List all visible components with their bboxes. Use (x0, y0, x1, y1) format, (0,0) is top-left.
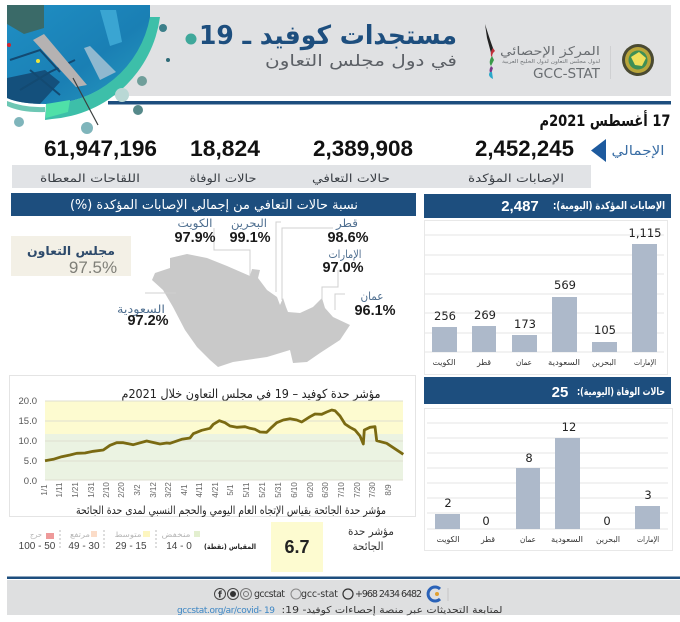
bar: Bahrain: 0 (603, 514, 611, 528)
bar: Bahrain (592, 323, 617, 367)
panel heading: نسبة حالات التعافي من إجمالي الإصابات المؤكدة (%) (70, 198, 358, 213)
heading: 2,487 (501, 198, 539, 215)
header image: vaccine circle (7, 5, 196, 134)
header band (100, 5, 671, 104)
x axis dates: 7/30 (368, 482, 377, 498)
heading (424, 377, 671, 404)
label: Qatar: قطر (335, 216, 358, 231)
total label with arrow (591, 139, 664, 162)
heading (424, 194, 671, 218)
label: Kuwait: 97.9% (174, 230, 216, 246)
panel: recovery rate map (11, 193, 416, 367)
bar: Qatar: قطر (476, 358, 491, 367)
callout: GCC average: مجلس التعاون (27, 244, 115, 259)
label: Saudi Arabia: السعودية (117, 302, 165, 317)
stat: recovered (312, 136, 413, 185)
updates row (177, 605, 502, 616)
x axis dates: 4/1 (180, 484, 189, 496)
label: UAE: 97.0% (322, 260, 364, 276)
y axis: 15.0 (18, 416, 37, 427)
label: Qatar (327, 216, 369, 246)
contact row: gccstat (254, 589, 285, 600)
x axis dates: 5/1 (226, 484, 235, 496)
scale: severe: حرج (30, 530, 42, 539)
panel: daily confirmed cases (424, 194, 671, 374)
y axis: 10.0 (18, 436, 37, 447)
x axis dates: 5/21 (258, 482, 267, 498)
contact row: gcc-stat (301, 589, 338, 600)
contact row: f (218, 590, 222, 600)
bar: Oman (512, 317, 537, 367)
totals labels band (12, 165, 591, 188)
x axis dates (40, 482, 393, 498)
label: Bahrain (229, 216, 271, 246)
callout: GCC average: 97.5% (69, 258, 117, 277)
logo: GCC emblem (622, 44, 654, 76)
y axis (18, 396, 37, 487)
leader lines (145, 222, 345, 310)
bar: Qatar: 0 (482, 514, 490, 528)
stat: recovered: حالات التعافي (312, 171, 390, 185)
bar: UAE (629, 226, 661, 368)
label: Oman: عمان (360, 289, 384, 303)
chart caption: مؤشر حدة الجائحة بقياس الإتجاه العام اليومي والحجم النسبي لمدى حدة الجائحة (76, 503, 386, 518)
bar: Oman: عمان (520, 535, 536, 544)
main heading: مستجدات كوفيد ـ 19 (199, 21, 457, 51)
bar: Qatar (472, 308, 496, 367)
bar: Kuwait: الكويت (432, 358, 456, 367)
scale: medium (114, 530, 150, 552)
bar: UAE: الإمارات (637, 535, 659, 545)
x axis dates: 7/10 (337, 482, 346, 498)
heading: 25 (552, 384, 568, 401)
scale: medium: 29 - 15 (115, 541, 147, 552)
bar: Kuwait: 2 (444, 496, 452, 510)
bar: UAE: الإمارات (634, 358, 656, 368)
stat: confirmed (468, 136, 574, 186)
subheading: في دول مجلس التعاون (265, 51, 457, 71)
bar: Saudi Arabia: السعودية (548, 358, 580, 367)
stat: recovered: 2,389,908 (313, 136, 413, 161)
severity index label (348, 525, 394, 553)
x axis dates: 1/11 (55, 482, 64, 497)
bar: Saudi Arabia: 569 (554, 278, 576, 292)
label: UAE: الإمارات (328, 247, 362, 262)
date: 17 أغسطس 2021م (540, 110, 670, 130)
updates row: gccstat.org/ar/covid- 19 (177, 606, 275, 616)
stat: vaccines: 61,947,196 (44, 136, 157, 161)
severity index label: مؤشر حدة (348, 525, 394, 538)
label: Kuwait: الكويت (178, 216, 212, 231)
scale: low (162, 530, 200, 552)
label: Bahrain: 99.1% (229, 230, 271, 246)
x axis dates: 1/31 (87, 482, 96, 498)
bar: Saudi Arabia (548, 278, 580, 367)
map of GCC (152, 254, 350, 367)
x axis dates: 1/21 (71, 482, 80, 498)
bar: Saudi Arabia (551, 420, 583, 544)
x axis dates: 3/12 (149, 482, 158, 498)
bar: Kuwait (435, 496, 460, 544)
bar: Qatar: 269 (474, 308, 496, 322)
x axis dates: 2/10 (102, 482, 111, 498)
panel heading (11, 193, 416, 216)
severity scale legend: المقياس (نقطة) (204, 543, 256, 551)
panel: daily deaths (424, 377, 672, 550)
contact row: +968 2434 6482 (355, 589, 422, 600)
x axis dates: 8/9 (384, 484, 393, 496)
severity index value (271, 522, 323, 572)
bar: Kuwait (432, 309, 457, 367)
bar: Saudi Arabia: السعودية (551, 535, 583, 544)
x axis dates: 5/31 (274, 482, 283, 498)
x axis dates: 3/22 (164, 482, 173, 498)
line chart: pandemic severity index (10, 376, 416, 518)
stat: deaths (190, 136, 260, 186)
logo: GCC-STAT (485, 24, 611, 82)
label: Qatar: 98.6% (327, 230, 369, 246)
stat: deaths: حالات الوفاة (190, 171, 256, 186)
stat: vaccines: اللقاحات المعطاة (40, 171, 140, 185)
x axis dates: 1/1 (40, 484, 49, 496)
y axis: 20.0 (18, 396, 37, 407)
bar: Oman: عمان (516, 358, 532, 367)
updates row: لمتابعة التحديثات عبر منصة إحصاءات كوفيد- 19: (282, 605, 502, 616)
bar: Qatar: قطر (480, 535, 495, 544)
severity index label: الجائحة (352, 540, 384, 553)
bar: Bahrain: 105 (594, 323, 616, 337)
label: Kuwait (174, 216, 216, 246)
title (199, 21, 457, 71)
scale: high: مرتفع (70, 530, 90, 539)
label: Bahrain: البحرين (231, 216, 267, 231)
bar: Bahrain (596, 514, 620, 544)
scale: high: 49 - 30 (68, 541, 100, 552)
severity bands (45, 401, 403, 480)
bar: UAE: 1,115 (629, 226, 661, 240)
label: Oman (354, 289, 396, 319)
severity index value: 6.7 (284, 537, 310, 557)
bar: Oman (516, 451, 540, 544)
bar: Oman: 8 (525, 451, 533, 465)
bar: Qatar (480, 514, 495, 544)
bar: Kuwait: الكويت (436, 535, 460, 544)
footer (7, 576, 680, 616)
scale: low: 14 - 0 (166, 541, 192, 552)
x axis dates: 6/20 (306, 482, 315, 498)
y axis: 5.0 (24, 456, 37, 467)
logo: GCC-STAT: GCC-STAT (533, 67, 600, 82)
stat: confirmed: الإصابات المؤكدة (468, 171, 564, 186)
total label with arrow: الإجمالي (612, 144, 664, 159)
scale: severe: 100 - 50 (19, 541, 56, 552)
scale: low: منخفض (162, 530, 190, 539)
scale: high (68, 530, 100, 552)
logo: GCC-STAT: لدول مجلس التعاون لدول الخليج العربية (502, 59, 601, 65)
bar: UAE: 3 (644, 488, 652, 502)
x axis dates: 3/2 (133, 484, 142, 496)
x axis dates: 4/21 (211, 482, 220, 498)
x axis dates: 2/20 (117, 482, 126, 498)
stat: confirmed: 2,452,245 (475, 136, 574, 161)
bar: UAE (635, 488, 660, 545)
label: Saudi Arabia: 97.2% (127, 313, 169, 329)
callout: GCC average (11, 236, 131, 277)
x axis dates: 5/11 (242, 482, 251, 497)
label: Oman: 96.1% (354, 303, 396, 319)
bar: Saudi Arabia: 12 (562, 420, 576, 434)
y axis: 0.0 (24, 476, 37, 487)
scale: severe (19, 530, 56, 552)
trend line (45, 410, 403, 461)
x axis dates: 4/11 (195, 482, 204, 497)
stat: vaccines (40, 136, 157, 185)
x axis dates: 6/10 (290, 482, 299, 498)
bar: Bahrain: البحرين (596, 535, 620, 544)
chart title: مؤشر حدة كوفيد – 19 في مجلس التعاون خلال 2021م (122, 386, 380, 402)
bar: Kuwait: 256 (434, 309, 456, 323)
contact row (214, 587, 448, 601)
label: UAE (322, 247, 364, 276)
stat: deaths: 18,824 (190, 136, 260, 161)
bar: Bahrain: البحرين (592, 358, 616, 367)
logo: GCC-STAT: المركز الإحصائي (500, 44, 600, 59)
scale: medium: متوسط (114, 530, 142, 539)
bar: Oman: 173 (514, 317, 536, 331)
x axis dates: 7/20 (353, 482, 362, 498)
label: Saudi Arabia (117, 302, 169, 329)
x axis dates: 6/30 (321, 482, 330, 498)
severity scale legend (19, 530, 256, 552)
